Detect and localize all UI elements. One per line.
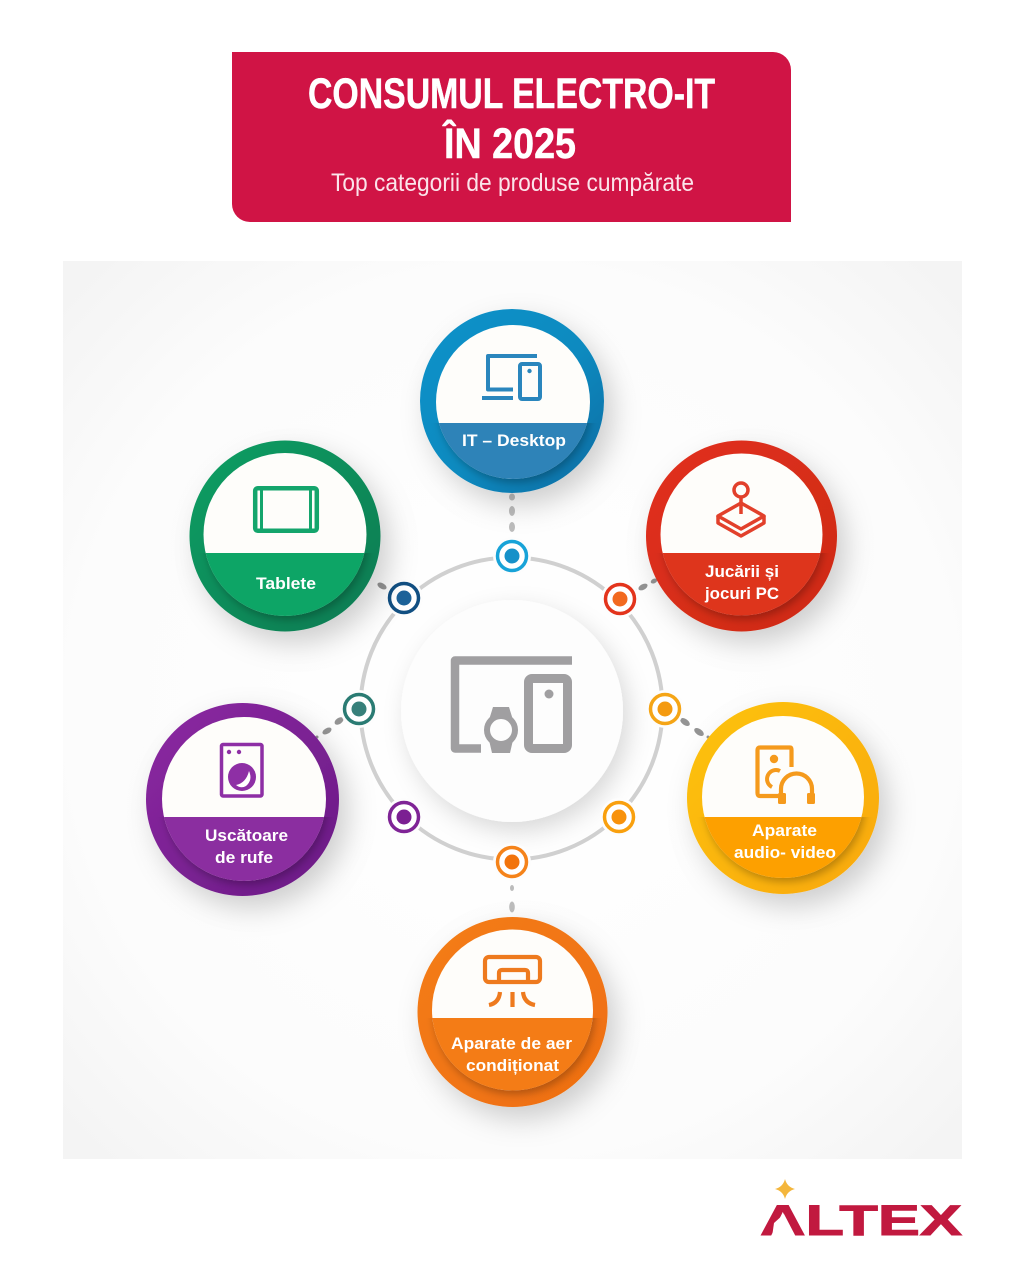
title line 2: ÎN 2025 xyxy=(442,119,576,168)
node: orange xyxy=(493,843,531,881)
label: Aparate de aer xyxy=(451,1034,572,1053)
label: IT – Desktop xyxy=(462,431,566,450)
panel: Aparate audio-video: audio- video xyxy=(734,843,836,862)
node: red xyxy=(601,580,639,618)
icon: tablet, watch and phone xyxy=(455,660,572,753)
logo: Altex: ALTEX xyxy=(760,1197,962,1245)
node: teal xyxy=(340,690,378,728)
node: light orange xyxy=(600,798,638,836)
subtitle: Top categorii de produse cumpărate xyxy=(331,169,694,197)
icon: star xyxy=(775,1179,795,1199)
header banner xyxy=(232,52,791,222)
icon: dryer xyxy=(222,744,262,796)
panel: Aparate de aer condiționat: condiționat xyxy=(466,1056,559,1075)
node: blue xyxy=(493,537,531,575)
node: yellow xyxy=(646,690,684,728)
panel: diagram background xyxy=(63,261,962,1159)
icon: air conditioner xyxy=(485,957,540,1007)
center disc with devices icon xyxy=(401,600,623,822)
panel: Uscătoare de rufe: de rufe xyxy=(215,848,273,867)
panel: Uscătoare de rufe xyxy=(146,703,339,896)
panel: IT Desktop xyxy=(420,309,604,493)
connectors xyxy=(316,494,710,912)
logo: Altex xyxy=(760,1179,962,1245)
panel: Tablete xyxy=(190,440,380,632)
icon: joystick xyxy=(718,483,764,536)
node: purple xyxy=(385,798,423,836)
label: Aparate xyxy=(752,821,817,840)
label: Jucării și xyxy=(705,562,779,581)
title line 1: CONSUMUL ELECTRO-IT xyxy=(308,70,715,118)
panel: Aparate de aer condiționat xyxy=(418,917,608,1107)
panel: Aparate audio-video xyxy=(687,702,879,894)
icon: laptop and phone xyxy=(482,356,540,399)
central ring xyxy=(360,558,662,860)
icon: tablet xyxy=(255,488,317,531)
label: Tablete xyxy=(256,574,316,593)
node: navy xyxy=(385,579,423,617)
panel: Jucării și jocuri PC xyxy=(646,440,837,632)
label: Uscătoare xyxy=(205,826,288,845)
panel: Jucării și jocuri PC: jocuri PC xyxy=(704,584,779,603)
icon: speaker and headphones xyxy=(758,748,815,804)
